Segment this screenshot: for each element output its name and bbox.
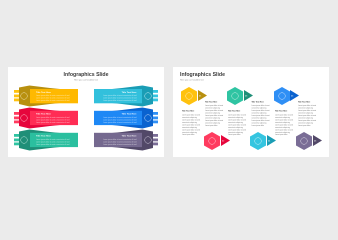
text block: step 06: Lorem ipsum dolor sit amet: [298, 119, 317, 122]
text block: step 03: Title Text Here: [228, 110, 240, 112]
text block: step 04: Title Text Here: [252, 100, 264, 104]
text block: step 04: Lorem ipsum dolor sit amet: [252, 114, 270, 117]
subtitle: left: Here you can headline text: [74, 78, 98, 82]
text block: step 01: Lorem ipsum dolor: [182, 133, 195, 136]
text block: step 05: [275, 110, 294, 136]
text block: step 05: consectetur adipiscing: [275, 126, 290, 129]
item: purple banner: Title Text Here: [122, 135, 137, 138]
text block: step 02: Lorem ipsum dolor sit amet: [205, 109, 224, 112]
step: teal hexagon 03: [227, 87, 253, 105]
item: blue banner: Title Text Here: [122, 113, 137, 116]
item: teal banner: Lorem ipsum dolor sit amet consectetur elit sed: [36, 140, 70, 143]
item: cyan banner: Lorem ipsum dolor sit amet consectetur elit sed: [103, 96, 137, 100]
text block: step 02: Lorem ipsum dolor sit amet: [205, 119, 224, 122]
panel: left slide: [8, 67, 164, 157]
text block: step 06: consectetur adipiscing: [298, 116, 313, 120]
text block: step 06: Lorem ipsum dolor: [298, 124, 311, 127]
text block: step 03: consectetur adipiscing: [228, 126, 243, 129]
step: cyan hexagon 04: [250, 132, 276, 150]
text block: step 02: Lorem ipsum dolor: [205, 124, 218, 127]
text block: step 01: consectetur adipiscing: [182, 116, 197, 119]
text block: step 01: Lorem ipsum dolor sit amet: [182, 124, 201, 126]
heading: left title: Infographics Slide: [64, 72, 109, 78]
text block: step 03: Lorem ipsum dolor: [228, 133, 241, 136]
text block: step 06: consectetur adipiscing: [298, 112, 313, 114]
item: blue banner: Lorem ipsum dolor sit amet consectetur elit sed: [103, 121, 137, 124]
text block: step 06: consectetur adipiscing: [298, 122, 313, 124]
text block: step 05: Title Text Here: [275, 110, 287, 112]
heading: right title: Infographics Slide: [180, 72, 225, 78]
item: yellow banner: Lorem ipsum dolor sit amet consectetur elit sed: [36, 94, 70, 97]
text block: step 06: Title Text Here: [298, 100, 310, 104]
item: yellow banner: Lorem ipsum dolor sit amet consectetur elit sed: [36, 96, 70, 100]
text block: step 01: consectetur adipiscing: [182, 131, 197, 134]
text block: step 01: Title Text Here: [182, 110, 194, 112]
text block: step 03: Lorem ipsum dolor sit amet: [228, 114, 247, 116]
text block: step 02: Lorem ipsum dolor sit amet: [205, 104, 224, 107]
item: red banner: [14, 108, 78, 128]
text block: step 02: Title Text Here: [205, 100, 217, 104]
item: blue banner: [94, 108, 158, 128]
step: teal hexagon 03: 03: [245, 96, 248, 98]
step: red hexagon 02: [204, 132, 230, 150]
text block: step 04: consectetur adipiscing: [252, 106, 267, 110]
item: purple banner: Lorem ipsum dolor sit amet consectetur elit sed: [103, 138, 137, 141]
text block: step 01: consectetur adipiscing: [182, 126, 197, 129]
text block: step 01: consectetur adipiscing: [182, 121, 197, 124]
item: teal banner: [14, 130, 78, 150]
text block: step 06: Lorem ipsum dolor sit amet: [298, 104, 317, 107]
text block: step 04: Lorem ipsum dolor sit amet: [252, 109, 270, 112]
item: red banner: Title Text Here: [36, 113, 52, 116]
text block: step 05: Lorem ipsum dolor sit amet: [275, 114, 294, 116]
item: cyan banner: [94, 86, 158, 106]
text block: step 03: [228, 110, 247, 136]
text block: step 02: consectetur adipiscing: [205, 106, 220, 110]
text block: step 05: Lorem ipsum dolor sit amet: [275, 118, 294, 122]
text block: step 05: Lorem ipsum dolor sit amet: [275, 128, 294, 132]
text block: step 05: consectetur adipiscing: [275, 131, 290, 134]
step: blue hexagon 05: 05: [291, 96, 294, 98]
text block: step 05: Lorem ipsum dolor: [275, 133, 288, 136]
text block: step 04: Lorem ipsum dolor: [252, 124, 264, 127]
text block: step 04: consectetur adipiscing: [252, 112, 267, 114]
item: yellow banner: Lorem ipsum dolor sit amet consectetur elit sed: [36, 99, 70, 102]
text block: step 01: Lorem ipsum dolor sit amet: [182, 118, 201, 122]
item: blue banner: Lorem ipsum dolor sit amet consectetur elit sed: [103, 116, 137, 119]
text block: step 03: consectetur adipiscing: [228, 121, 243, 124]
text block: step 03: Lorem ipsum dolor sit amet: [228, 124, 247, 126]
item: cyan banner: Lorem ipsum dolor sit amet consectetur elit sed: [103, 94, 137, 97]
step: blue hexagon 05: [274, 87, 299, 105]
text block: step 03: Lorem ipsum dolor sit amet: [228, 118, 247, 122]
step: cyan hexagon 04: 04: [268, 140, 271, 142]
item: red banner: Lorem ipsum dolor sit amet consectetur elit sed: [36, 116, 70, 119]
text block: step 04: [252, 100, 270, 127]
item: yellow banner: Title Text Here: [36, 91, 52, 94]
text block: step 02: consectetur adipiscing: [205, 112, 220, 114]
item: teal banner: Title Text Here: [36, 135, 52, 138]
item: cyan banner: Lorem ipsum dolor sit amet consectetur elit sed: [103, 99, 137, 102]
item: cyan banner: Title Text Here: [122, 91, 137, 94]
item: teal banner: Lorem ipsum dolor sit amet consectetur elit sed: [36, 138, 70, 141]
text block: step 02: [205, 100, 224, 127]
step: yellow hexagon 01: 01: [199, 96, 202, 98]
item: purple banner: Lorem ipsum dolor sit amet consectetur elit sed: [103, 140, 137, 143]
text block: step 04: Lorem ipsum dolor sit amet: [252, 104, 270, 107]
step: red hexagon 02: 02: [222, 140, 225, 142]
item: yellow banner: [14, 86, 78, 106]
text block: step 01: [182, 110, 201, 136]
panel: right slide: [173, 67, 329, 157]
item: teal banner: Lorem ipsum dolor sit amet consectetur elit sed: [36, 143, 70, 146]
step: purple hexagon 06: [296, 132, 322, 150]
text block: step 03: consectetur adipiscing: [228, 131, 243, 134]
text block: step 06: Lorem ipsum dolor sit amet: [298, 109, 317, 112]
text block: step 01: Lorem ipsum dolor sit amet: [182, 128, 201, 132]
item: red banner: Lorem ipsum dolor sit amet consectetur elit sed: [36, 121, 70, 124]
text block: step 03: Lorem ipsum dolor sit amet: [228, 128, 247, 132]
step: purple hexagon 06: 06: [314, 140, 317, 142]
text block: step 05: consectetur adipiscing: [275, 121, 290, 124]
text block: step 02: Lorem ipsum dolor sit amet: [205, 114, 224, 117]
text block: step 05: consectetur adipiscing: [275, 116, 290, 119]
text block: step 06: [298, 100, 317, 127]
text block: step 06: Lorem ipsum dolor sit amet: [298, 114, 317, 117]
step: yellow hexagon 01: [181, 87, 207, 105]
text block: step 01: Lorem ipsum dolor sit amet: [182, 114, 201, 116]
item: red banner: Lorem ipsum dolor sit amet consectetur elit sed: [36, 118, 70, 121]
item: blue banner: Lorem ipsum dolor sit amet consectetur elit sed: [103, 118, 137, 121]
text block: step 05: Lorem ipsum dolor sit amet: [275, 124, 294, 126]
item: purple banner: Lorem ipsum dolor sit amet consectetur elit sed: [103, 143, 137, 146]
text block: step 04: Lorem ipsum dolor sit amet: [252, 119, 270, 122]
text block: step 03: consectetur adipiscing: [228, 116, 243, 119]
text block: step 04: consectetur adipiscing: [252, 122, 267, 124]
text block: step 02: consectetur adipiscing: [205, 122, 220, 124]
text block: step 06: consectetur adipiscing: [298, 106, 313, 110]
item: purple banner: [94, 130, 158, 150]
text block: step 02: consectetur adipiscing: [205, 116, 220, 120]
text block: step 04: consectetur adipiscing: [252, 116, 267, 120]
subtitle: right: Here you can headline text: [180, 78, 204, 82]
